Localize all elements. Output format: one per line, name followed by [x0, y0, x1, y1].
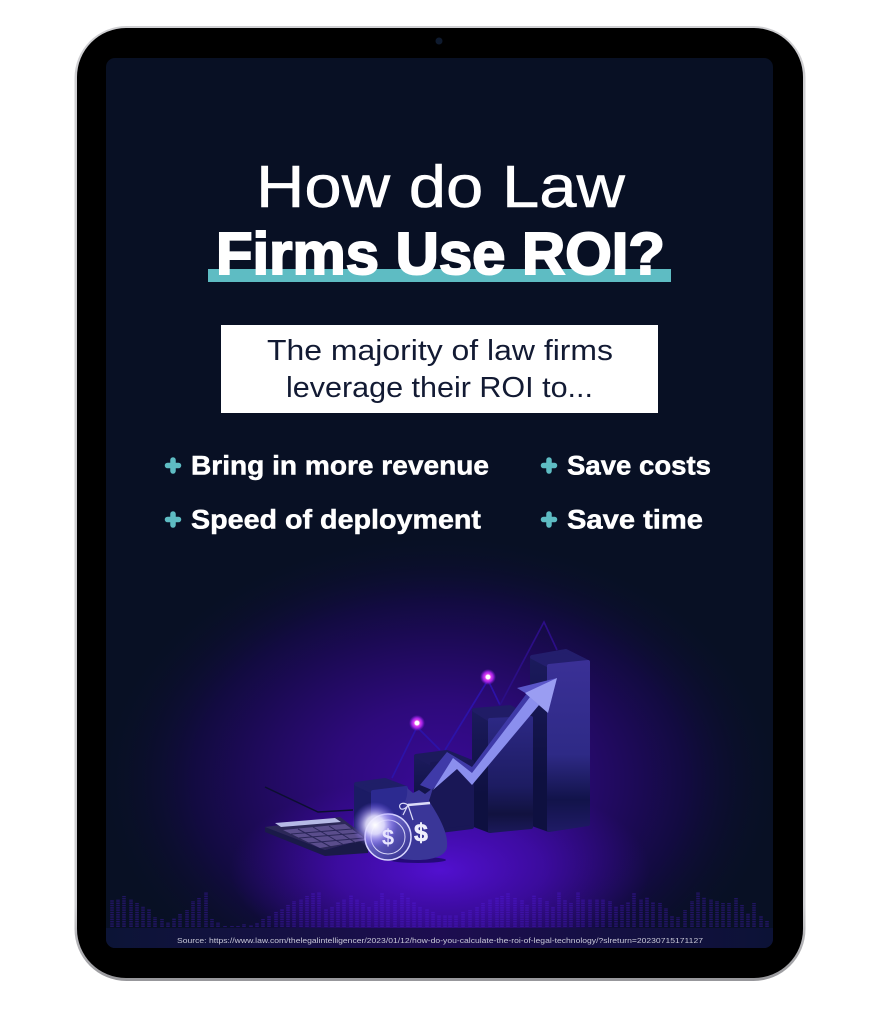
- bar 4: [532, 651, 588, 830]
- benefit: Save time: Save time: [567, 504, 703, 534]
- coin: $: [382, 825, 394, 850]
- source note: Source: https://www.law.com/thelegalintelligencer/2023/01/12/how-do-you-calculate-the-roi-of-legal-technology/?slreturn=20230715171127: [177, 936, 703, 945]
- thin rising lines: [392, 622, 557, 778]
- bar 2: [416, 752, 472, 832]
- tie: [400, 803, 430, 820]
- coin: [352, 802, 411, 860]
- money bag: $: [414, 819, 428, 847]
- title underline: [208, 269, 671, 282]
- illustration: ROI growth chart: [265, 622, 588, 863]
- title: [208, 164, 671, 282]
- calculator: [265, 817, 368, 856]
- money bag: [390, 788, 447, 863]
- benefit: Save time: [540, 508, 702, 529]
- benefit: Speed of deployment: Speed of deployment: [191, 504, 481, 534]
- tablet frame: [74, 26, 806, 981]
- bar 1: [356, 780, 406, 836]
- benefit: Save costs: Save costs: [567, 450, 711, 480]
- arrow: [420, 678, 557, 790]
- title line 2: Firms Use ROI?: [216, 221, 665, 287]
- screen panel: [106, 58, 773, 948]
- data point markers: [409, 669, 496, 731]
- callout box: The majority of law firms: [267, 335, 613, 367]
- line: cable: [265, 787, 353, 812]
- callout box: leverage their ROI to...: [286, 372, 593, 404]
- benefit: Bring in more revenue: Bring in more revenue: [191, 450, 489, 480]
- title line 1: How do Law: [256, 154, 625, 220]
- icon: camera: [436, 38, 442, 44]
- waveform decoration: [112, 892, 767, 927]
- bar 3: [474, 707, 531, 831]
- benefit: Save costs: [540, 456, 710, 475]
- infographic canvas: [74, 26, 806, 981]
- callout box: [221, 325, 658, 413]
